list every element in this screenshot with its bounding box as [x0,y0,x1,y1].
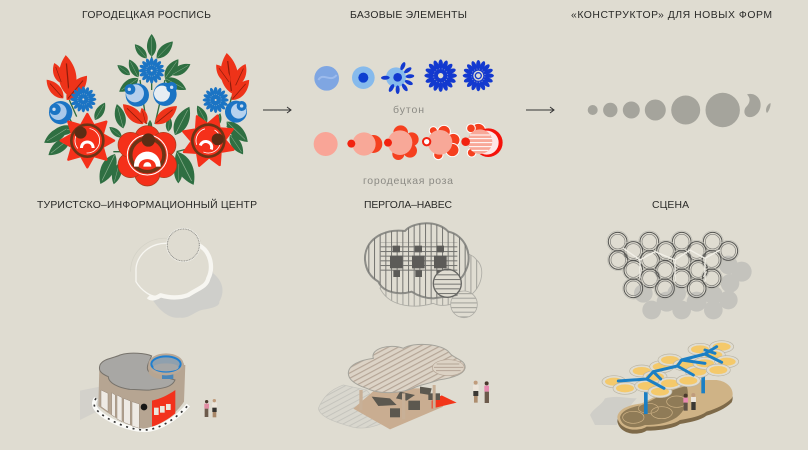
stage floor [617,380,733,430]
title: stage: СЦЕНА [652,200,689,211]
red floor [432,395,457,409]
plan shadow circles [634,256,752,319]
plan: pergola [365,223,482,318]
stage shadow [590,397,637,425]
title: base elements: БАЗОВЫЕ ЭЛЕМЕНТЫ [350,10,467,21]
plan: stage [607,231,752,319]
visitors [204,399,217,417]
base elements: bud row [314,59,494,94]
3D view: stage [590,341,739,434]
red band [152,390,175,427]
yellow disks [602,341,739,398]
furniture [372,387,440,417]
blue branches [618,347,722,388]
stage floor edge [617,384,733,434]
building walls [98,363,185,429]
label: bud: бутон [393,104,424,116]
arrow: base elements to constructor [526,107,554,113]
visitors [683,393,696,411]
glass panels [101,390,139,428]
arrow: painting to base elements [263,107,291,113]
black emblem [141,404,147,410]
title: tourist information centre: ТУРИСТСКО–ИНФОРМАЦИОННЫЙ ЦЕНТР [37,198,257,211]
plan: tourist information centre [131,228,223,318]
plan outline [136,236,211,297]
base elements: rose row [314,123,503,160]
roof [99,353,175,390]
title: pergola: ПЕРГОЛА–НАВЕС [364,200,452,211]
title: constructor for new forms: «КОНСТРУКТОР» ДЛЯ НОВЫХ ФОРМ [571,10,772,21]
building shadow [80,387,100,420]
paving ring [94,398,188,430]
plan shadow hatched [380,253,482,318]
cylinder [149,363,184,379]
folk painting illustration [41,34,253,188]
canopy outline [365,223,469,298]
title: Gorodets painting: ГОРОДЕЦКАЯ РОСПИСЬ [82,10,211,21]
plan shadow [152,258,223,318]
3D view: pergola [318,344,489,429]
visitors [473,381,489,403]
constructor shapes: gray circles and drops [588,93,771,127]
pergola tables [390,246,447,277]
roof canopy [348,344,465,393]
deck [353,388,443,429]
pergola shadow [318,385,390,428]
plan rings [607,231,739,299]
columns [359,385,436,419]
plan branches [623,248,720,282]
columns [644,376,705,414]
3D view: tourist information centre [80,353,217,430]
label: Gorodets rose: городецкая роза [363,175,453,187]
